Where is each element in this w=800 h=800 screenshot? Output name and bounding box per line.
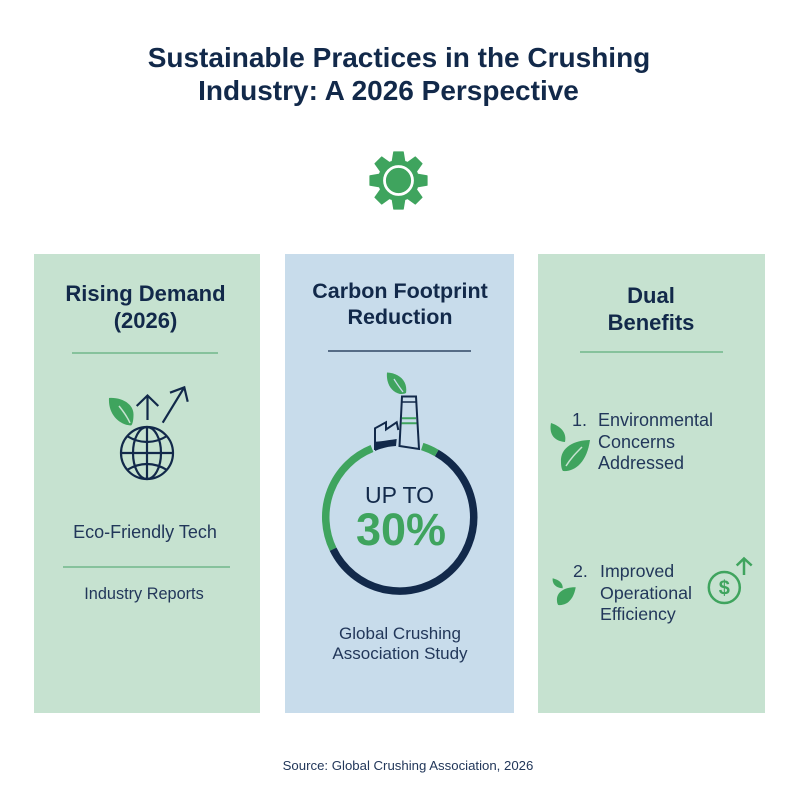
heading: carbon footprint: Reduction <box>347 305 453 329</box>
text: benefit 1: 1. <box>572 410 587 430</box>
panel: dual benefits <box>538 254 765 713</box>
chart: 30% ring <box>326 446 474 591</box>
title: Sustainable Practices in the Crushing <box>148 42 650 73</box>
title <box>148 42 650 106</box>
heading: carbon footprint <box>312 279 488 329</box>
heading: dual benefits: Dual <box>627 283 675 308</box>
text: industry reports: Industry Reports <box>84 585 204 603</box>
heading: rising demand: Rising Demand <box>65 281 226 306</box>
icon: gear <box>370 152 427 209</box>
heading: carbon footprint: Carbon Footprint <box>312 279 488 303</box>
title: Industry: A 2026 Perspective <box>198 75 579 106</box>
text: eco-friendly tech: Eco-Friendly Tech <box>73 522 217 542</box>
text: study source: Association Study <box>332 644 468 663</box>
text: up to: UP TO <box>365 482 434 508</box>
icon: small leaves <box>553 578 576 605</box>
text: benefit 1: Concerns <box>598 432 675 452</box>
text: benefit 2: Operational <box>600 583 692 603</box>
source footer: Source: Global Crushing Association, 2026 <box>283 758 533 773</box>
text: benefit 2: 2. <box>573 561 588 581</box>
icon: globe with leaf and arrows <box>109 387 188 479</box>
text: 30%: 30% <box>356 504 446 555</box>
text: benefit 1: Addressed <box>598 453 684 473</box>
text: benefit 1: Environmental <box>598 410 713 430</box>
panel: carbon footprint reduction <box>285 254 514 713</box>
text: study source <box>332 624 468 663</box>
icon: leaves <box>551 423 590 471</box>
panel: rising demand <box>34 254 260 713</box>
heading: rising demand <box>65 281 226 333</box>
icon: factory with leaf <box>375 372 419 451</box>
heading: dual benefits: Benefits <box>608 310 694 335</box>
heading: rising demand: (2026) <box>114 308 177 333</box>
text: benefit 2: Improved <box>600 561 674 581</box>
icon: dollar with arrow: $ <box>719 578 730 600</box>
text: study source: Global Crushing <box>339 624 461 643</box>
text: benefit 2: Efficiency <box>600 604 676 624</box>
icon: dollar with arrow <box>709 558 752 603</box>
text: benefit 2 <box>573 561 692 624</box>
text: benefit 1 <box>572 410 713 473</box>
heading: dual benefits <box>608 283 694 335</box>
